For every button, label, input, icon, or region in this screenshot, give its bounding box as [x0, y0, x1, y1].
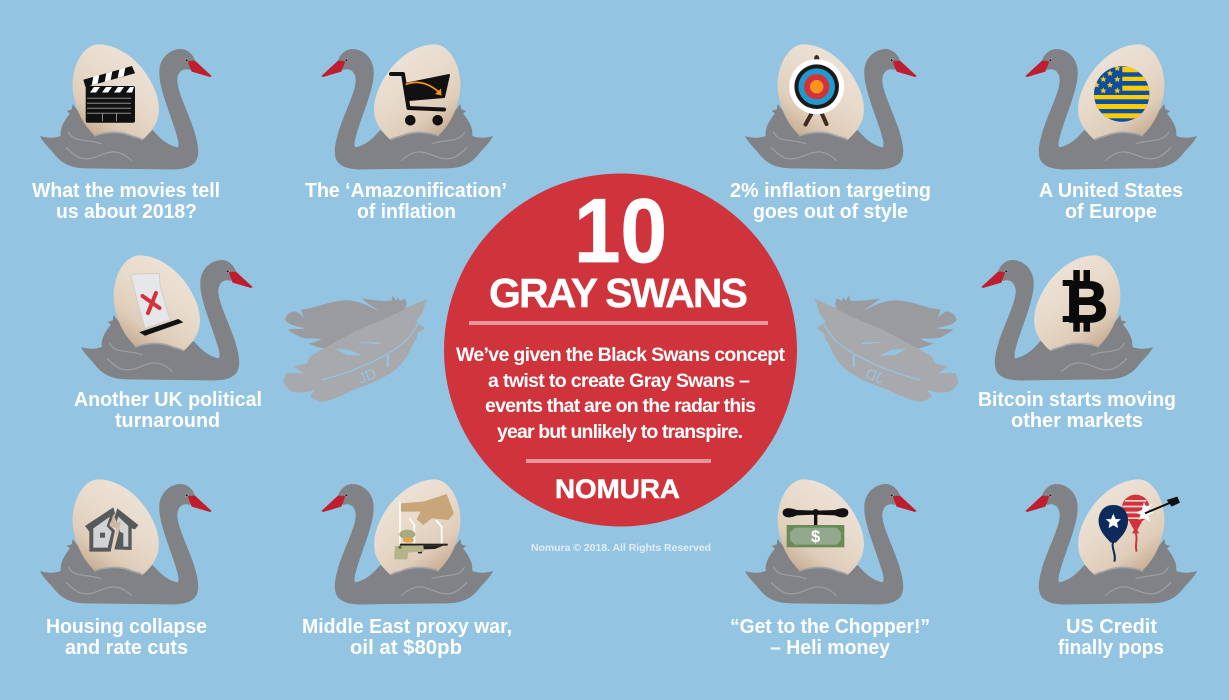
icon: bitcoin symbol: B	[1066, 270, 1108, 335]
caption: Bitcoin starts moving	[978, 389, 1176, 411]
swan	[321, 44, 493, 169]
swan	[1025, 479, 1197, 604]
caption: What the movies tell	[32, 180, 220, 202]
caption: of Europe	[1065, 201, 1157, 223]
description: events that are on the radar this	[485, 395, 756, 417]
panel: US credit	[1025, 479, 1197, 659]
panel: middle east	[302, 479, 512, 659]
panel: central red circle	[444, 174, 797, 526]
caption: A United States	[1039, 180, 1183, 202]
caption: Housing collapse	[46, 616, 207, 638]
icon: ballot paper	[131, 273, 183, 336]
caption	[978, 389, 1176, 432]
swan	[40, 479, 212, 604]
swan	[40, 44, 212, 169]
caption: “Get to the Chopper!”	[730, 616, 930, 638]
icon: flying dollar bill	[783, 508, 848, 547]
swan	[1025, 44, 1197, 169]
icon: US-EU flag	[1094, 65, 1150, 122]
caption: Another UK political	[74, 389, 262, 411]
caption	[730, 616, 930, 659]
logo: Nomura: NOMURA	[555, 474, 680, 504]
caption: and rate cuts	[65, 637, 188, 659]
caption: finally pops	[1058, 637, 1164, 659]
circle	[444, 174, 797, 526]
caption	[305, 180, 507, 223]
caption	[46, 616, 207, 659]
caption	[302, 616, 512, 659]
caption: turnaround	[115, 410, 220, 432]
panel: heli money	[730, 479, 930, 659]
caption: us about 2018?	[56, 201, 197, 223]
description: We’ve given the Black Swans concept	[456, 344, 786, 366]
feather: right	[815, 295, 958, 402]
description: year but unlikely to transpire.	[497, 421, 743, 443]
panel: inflation targeting	[730, 44, 931, 223]
caption: US Credit	[1066, 616, 1157, 638]
icon: film clapperboard	[83, 66, 135, 123]
caption	[74, 389, 262, 432]
panel: UK politics	[74, 255, 262, 432]
copyright: Nomura © 2018. All Rights Reserved	[531, 543, 711, 554]
description: a twist to create Gray Swans –	[488, 370, 750, 392]
swan	[745, 44, 917, 169]
panel: amazonification	[305, 44, 507, 223]
icon: archery target	[789, 55, 844, 124]
heading: GRAY SWANS	[489, 270, 748, 316]
caption: goes out of style	[753, 201, 908, 223]
caption: 2% inflation targeting	[730, 180, 931, 202]
caption: The ‘Amazonification’	[305, 180, 507, 202]
swan	[81, 255, 253, 380]
caption	[730, 180, 931, 223]
caption: of inflation	[357, 201, 456, 223]
caption	[1039, 180, 1183, 223]
big number: 10	[574, 181, 667, 282]
caption: other markets	[1011, 410, 1143, 432]
caption: oil at $80pb	[350, 637, 462, 659]
panel: bitcoin	[978, 255, 1176, 432]
icon: shopping cart	[391, 74, 449, 126]
caption: – Heli money	[770, 637, 891, 659]
caption	[1058, 616, 1164, 659]
panel: housing	[40, 479, 212, 659]
icon: hand and soldier puppet	[394, 494, 454, 559]
icon: flying dollar bill: $	[811, 527, 821, 546]
divider top	[469, 321, 768, 325]
feather: left	[283, 295, 427, 402]
caption	[32, 180, 220, 223]
swan	[745, 479, 917, 604]
caption: Middle East proxy war,	[302, 616, 512, 638]
divider bottom	[526, 459, 711, 463]
swan	[981, 255, 1153, 380]
description	[456, 344, 786, 443]
panel: united states of europe	[1025, 44, 1197, 223]
icon: cracked house	[85, 507, 138, 552]
swan	[321, 479, 493, 604]
icon: balloons and arrow	[1099, 495, 1180, 562]
panel: movies	[32, 44, 220, 223]
